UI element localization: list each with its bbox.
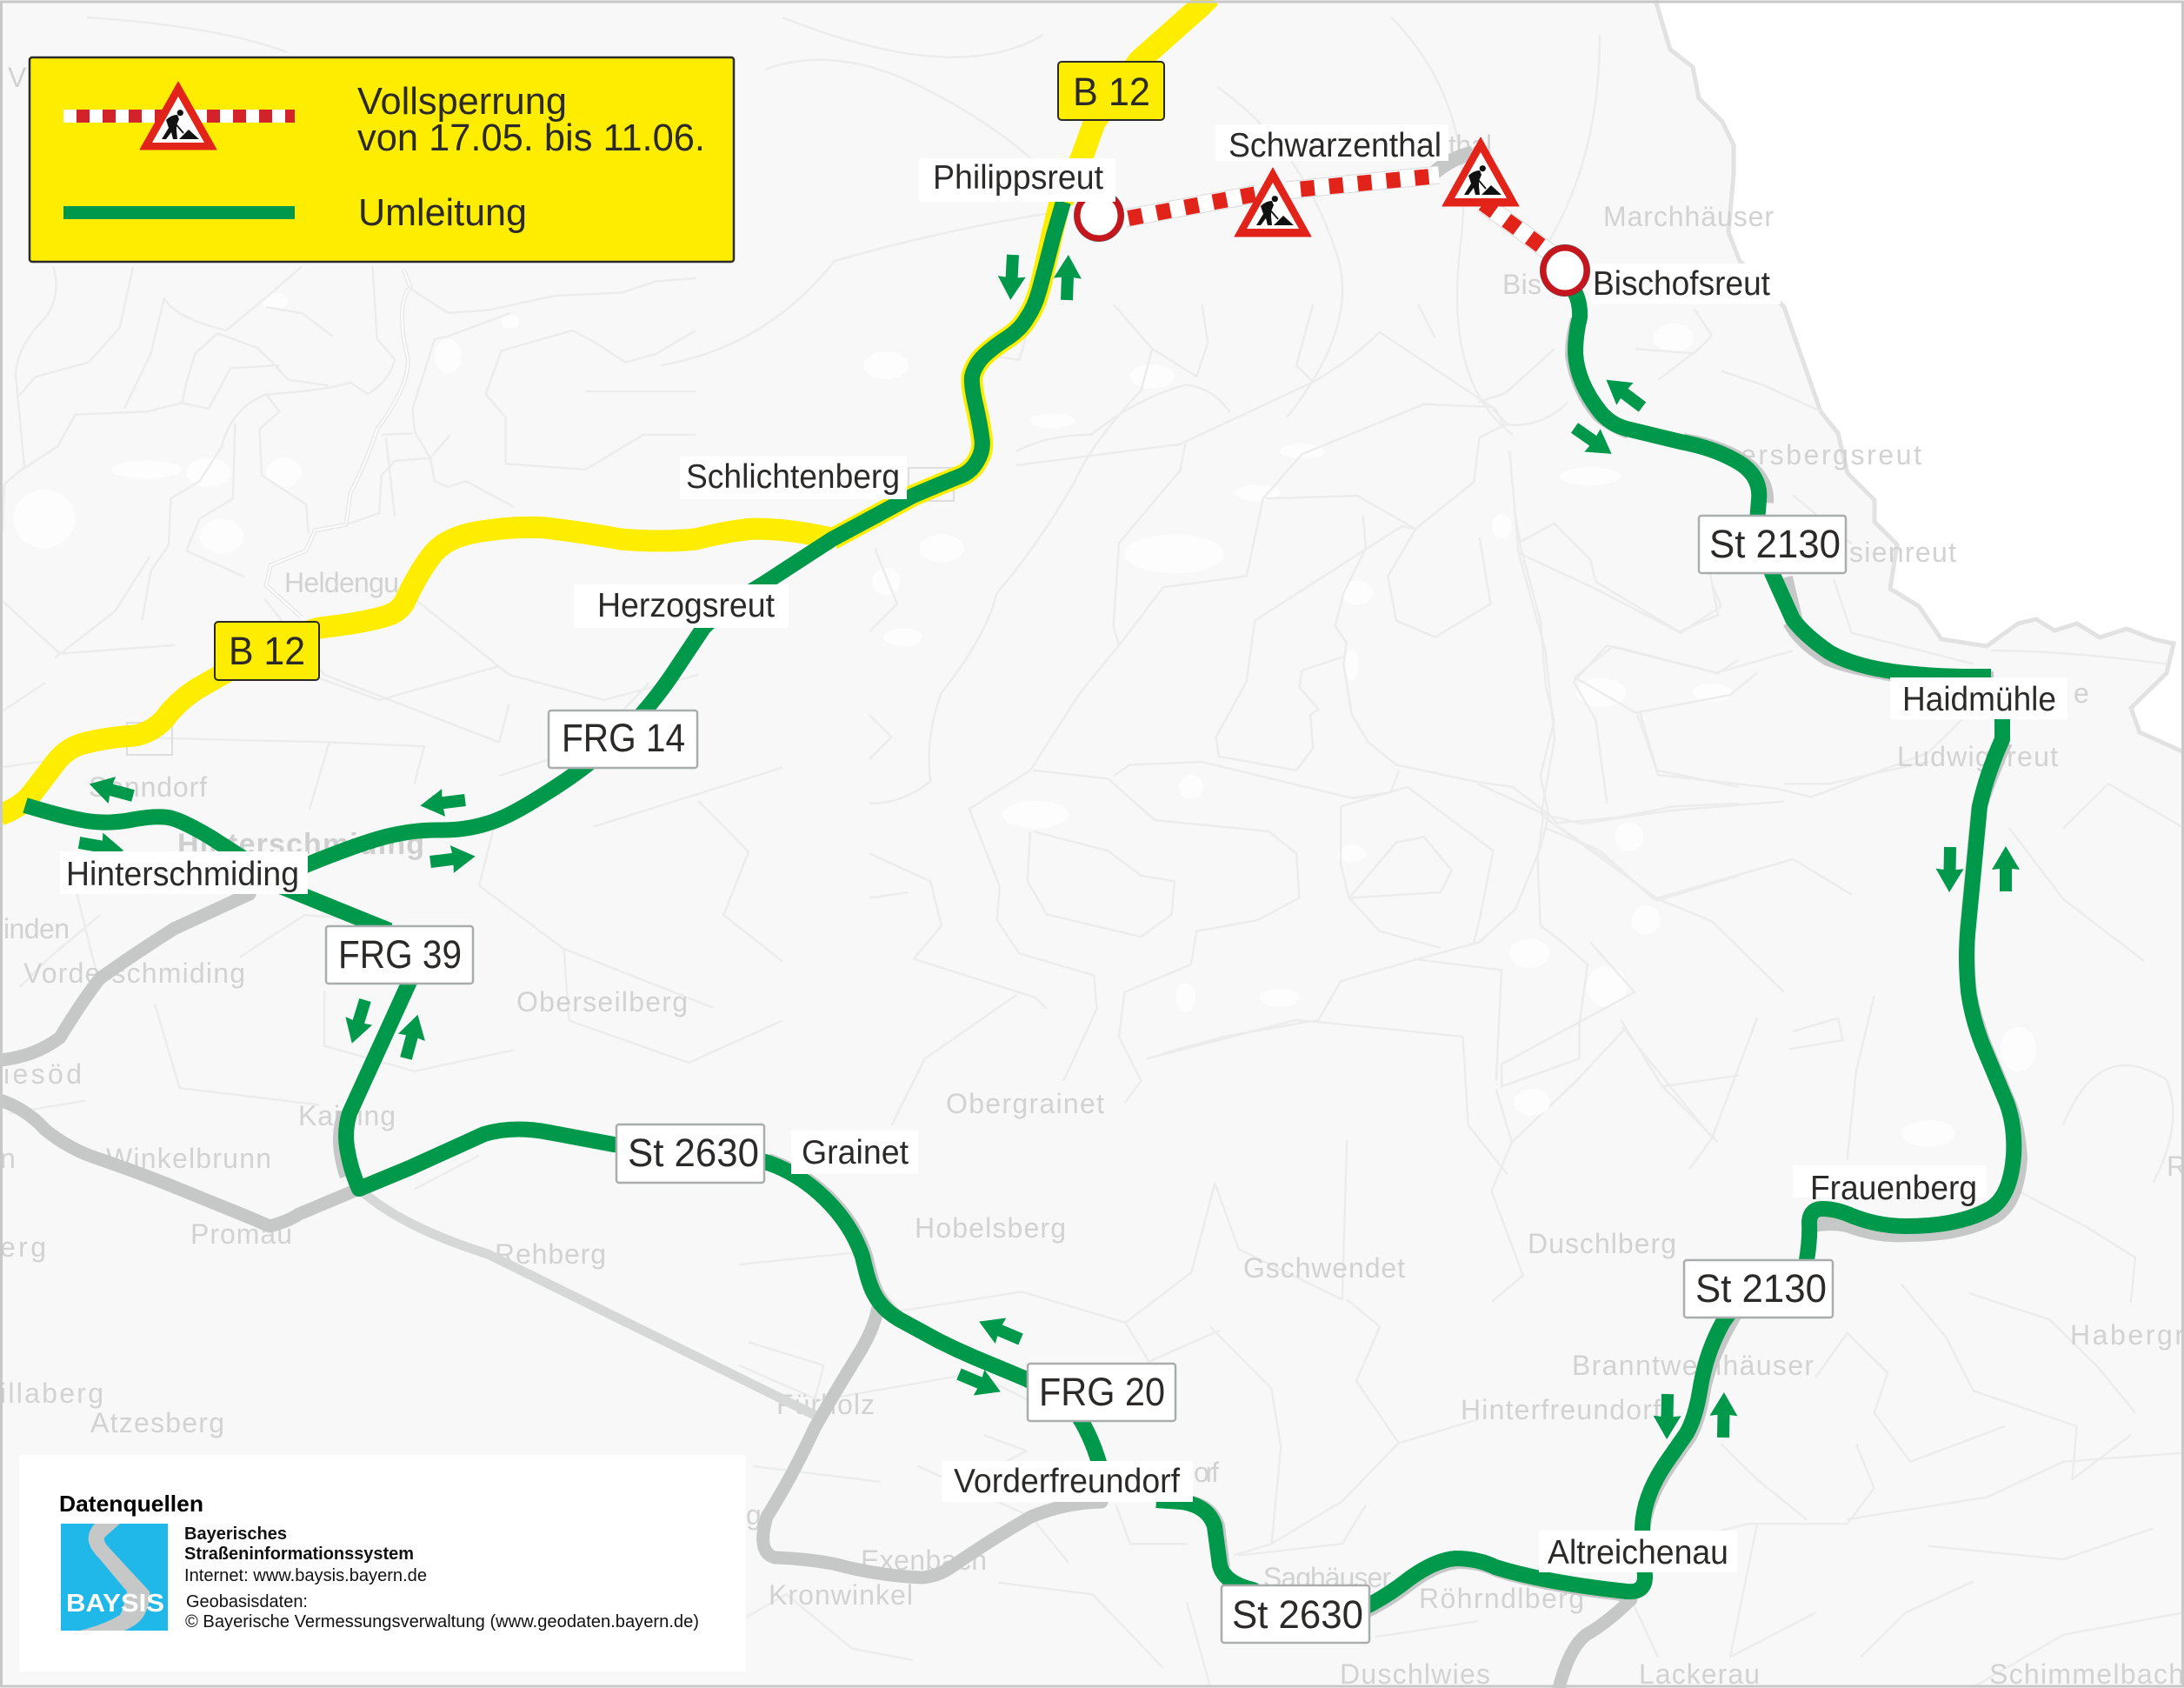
- grey place names on the base map: Hobelsberg: [915, 1212, 1066, 1244]
- grey place names on the base map: iesöd: [3, 1058, 82, 1090]
- grey place names on the base map: V: [8, 62, 27, 93]
- legend text: diversion: Umleitung: [358, 191, 527, 234]
- grey place names on the base map: Kaining: [298, 1100, 396, 1131]
- data sources text: © Bayerische Vermessungsverwaltung (www.geodaten.bayern.de): [185, 1612, 699, 1631]
- grey place names on the base map: Hinterfreundorf: [1461, 1394, 1661, 1425]
- data sources panel: [19, 1455, 746, 1671]
- data sources text: Geobasisdaten:: [186, 1592, 308, 1611]
- grey place names on the base map: Atzesberg: [90, 1407, 224, 1438]
- grey secondary roads: [0, 153, 1631, 1688]
- place label: Herzogsreut: Herzogsreut: [597, 587, 775, 624]
- icon: roadworks sign 2: [1442, 137, 1519, 206]
- road sign: FRG 39: FRG 39: [338, 932, 462, 977]
- data sources heading: Datenquellen: [59, 1491, 203, 1517]
- grey place names on the base map: e: [2074, 677, 2089, 709]
- road sign: B 12 west: B 12: [229, 629, 305, 673]
- direction arrows: [77, 254, 2020, 1439]
- road sign: B 12 north: [1058, 62, 1164, 120]
- place label: Grainet: Grainet: [802, 1134, 909, 1171]
- road sign: St 2130 north: St 2130: [1709, 522, 1841, 566]
- icon: roadworks sign 1: [1235, 168, 1311, 237]
- legend text: closure dates: Vollsperrung: [357, 80, 567, 123]
- grey place names on the base map: Promau: [190, 1218, 292, 1250]
- grey place names on the base map: Heldengu: [284, 567, 399, 598]
- data sources text: Straßeninformationssystem: [184, 1545, 414, 1564]
- grey place names on the base map: Vorderschmiding: [23, 957, 245, 989]
- grey place names on the base map: n: [0, 1143, 16, 1174]
- grey place names on the base map: Gschwendet: [1243, 1252, 1405, 1284]
- road sign: FRG 20: FRG 20: [1039, 1370, 1165, 1414]
- grey place names on the base map: Branntweinhäuser: [1572, 1350, 1814, 1381]
- road sign: FRG 14: FRG 14: [562, 716, 685, 760]
- grey place names on the base map: erg: [0, 1231, 46, 1263]
- legend panel: [30, 57, 734, 262]
- place label: Hinterschmiding: Hinterschmiding: [66, 856, 299, 893]
- grey place names on the base map: Saghäuser: [1263, 1562, 1391, 1593]
- grey place names on the base map: illaberg: [0, 1378, 103, 1409]
- diversion route (green): [25, 202, 2014, 1611]
- road: B 12 (yellow): [0, 0, 1210, 815]
- grey place names on the base map: Röhrndlberg: [1419, 1583, 1584, 1614]
- place label: Vorderfreundorf: Vorderfreundorf: [954, 1463, 1180, 1500]
- grey place names on the base map: Rehberg: [495, 1238, 606, 1270]
- icon: closure point Bischofsreut: [1540, 244, 1590, 297]
- grey place names on the base map: Bis: [1502, 269, 1541, 300]
- place label: Frauenberg: Frauenberg: [1810, 1170, 1977, 1207]
- grey road casing beneath the diversion: [768, 320, 2020, 1613]
- legend text: closure dates: [357, 80, 705, 159]
- data sources text: Bayerisches: [184, 1525, 287, 1544]
- BAYSIS logo: [61, 1524, 168, 1631]
- full closure section (red and white dashes): [1125, 175, 1552, 254]
- place label: Schwarzenthal: Schwarzenthal: [1228, 127, 1442, 164]
- grey place names on the base map: Oberseilberg: [516, 986, 688, 1017]
- road sign: B 12 north: B 12: [1073, 70, 1150, 114]
- legend symbol: closure: [63, 82, 295, 150]
- grey place names on the base map: ersbergsreut: [1741, 439, 1921, 470]
- grey place names on the base map: Winkelbrunn: [106, 1143, 271, 1174]
- data sources text: [184, 1525, 699, 1631]
- grey place names on the base map: g: [746, 1499, 762, 1531]
- grey place names on the base map: Sonndorf: [89, 771, 207, 803]
- place label: Altreichenau: Altreichenau: [1548, 1534, 1728, 1571]
- grey place names on the base map: sienreut: [1849, 537, 1956, 568]
- place label: Philippsreut: Philippsreut: [933, 159, 1103, 197]
- grey place names on the base map: Exenbach: [861, 1545, 987, 1576]
- data sources text: Internet: www.baysis.bayern.de: [184, 1566, 427, 1585]
- grey place names on the base map: Duschlberg: [1528, 1228, 1676, 1259]
- place label: Haidmühle: Haidmühle: [1902, 681, 2056, 718]
- icon: closure point Philippsreut: [1074, 190, 1124, 242]
- grey place names on the base map: thal: [1448, 130, 1492, 161]
- BAYSIS logo: BAYSIS: [66, 1590, 164, 1618]
- place label: Bischofsreut: Bischofsreut: [1593, 265, 1770, 303]
- grey place names on the base map: Obergrainet: [946, 1088, 1104, 1119]
- legend text: closure dates: von 17.05. bis 11.06.: [357, 117, 705, 159]
- grey place names on the base map: Fürholz: [776, 1389, 875, 1420]
- grey place names on the base map: Marchhäuser: [1603, 201, 1774, 232]
- road sign: St 2630 south: St 2630: [1232, 1592, 1363, 1637]
- grey place names on the base map: Hinterschmiding: [177, 828, 424, 861]
- road sign: St 2630 west: [616, 1124, 764, 1183]
- legend symbol: diversion: [63, 206, 295, 219]
- place label: Schlichtenberg: Schlichtenberg: [686, 458, 900, 496]
- grey place names on the base map: Ludwigsreut: [1897, 741, 2058, 772]
- grey place names on the base map: inden: [3, 913, 70, 944]
- grey place names on the base map: Kronwinkel: [769, 1579, 913, 1611]
- road sign: St 2130 south: St 2130: [1695, 1266, 1827, 1311]
- road sign: B 12 west: [215, 622, 319, 680]
- grey place names on the base map: orf: [1194, 1457, 1219, 1488]
- grey place names on the base map: Habergr: [2070, 1319, 2184, 1351]
- road sign: St 2630 west: St 2630: [628, 1131, 759, 1175]
